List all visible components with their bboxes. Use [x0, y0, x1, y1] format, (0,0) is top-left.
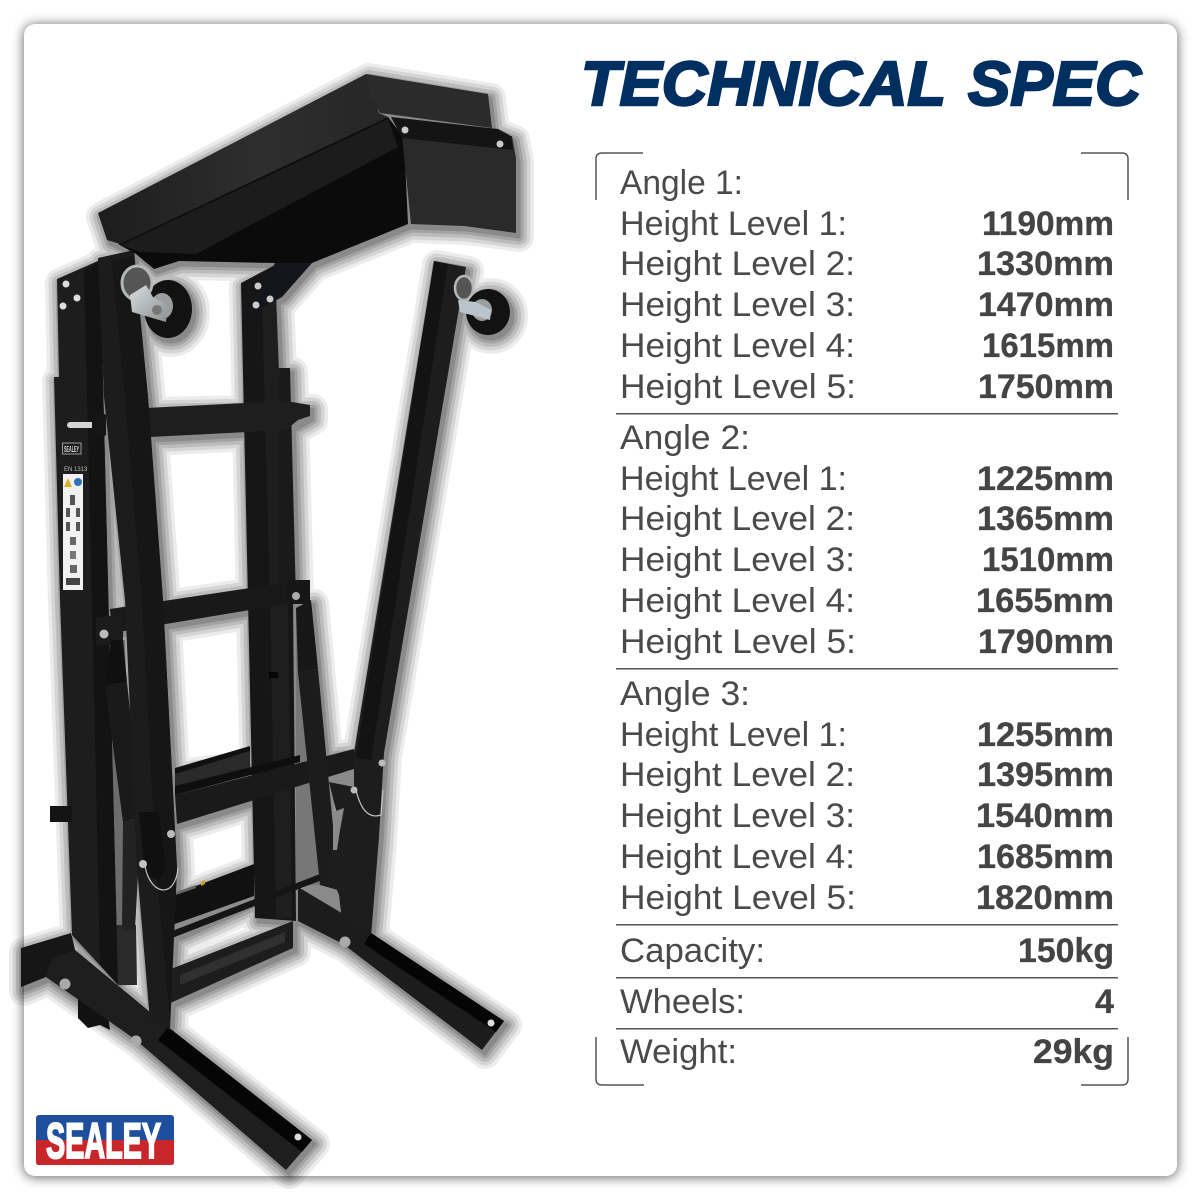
seat support body [118, 117, 408, 269]
spec group: angle 2: 1365mm [977, 500, 1114, 538]
rear left column [50, 260, 118, 985]
spec group: angle 1: 1470mm [978, 286, 1114, 324]
spec group: angle 2: Height Level 1: [620, 460, 847, 498]
left top bolts [60, 280, 80, 310]
spec group: angle 2: 1225mm [977, 460, 1114, 498]
spec group: angle 3: Height Level 2: [620, 756, 855, 794]
rear base bar [21, 933, 80, 987]
spec group: angle 1: Height Level 1: [620, 205, 847, 243]
left base foot [46, 950, 312, 1170]
safety label [62, 443, 88, 590]
spec row: wheels [620, 983, 1114, 1021]
spec group: angle 1: 1750mm [978, 368, 1114, 406]
underside clamp block [78, 995, 110, 1030]
spec group: angle 2 [620, 419, 1114, 661]
logo: Sealey: SEALEY [46, 1113, 161, 1169]
soft shadow behind the stand [24, 78, 519, 1174]
spec group: angle 3: Height Level 4: [620, 838, 855, 876]
spec group: angle 1: Height Level 5: [620, 368, 856, 406]
grey shaded gaps between frame parts [107, 610, 322, 985]
lower rear box frame [168, 921, 293, 1004]
spec group: angle 1: Height Level 4: [620, 327, 855, 365]
spec group: angle 1: 1615mm [982, 327, 1114, 365]
middle cross bar [110, 582, 292, 633]
spec group: angle 3: Angle 3: [620, 675, 750, 713]
spec row: weight: Weight: [620, 1033, 737, 1071]
metal strap with bolts [391, 117, 513, 150]
title: TECHNICAL [581, 50, 946, 119]
seat cushion long [98, 74, 388, 244]
spec group: angle 2: Angle 2: [620, 419, 750, 457]
spec group: angle 2: Height Level 4: [620, 582, 855, 620]
support bracket under seat [246, 263, 312, 317]
product: foldable creeper stand [21, 74, 519, 1174]
left castor wheel [122, 266, 192, 338]
spec row: capacity [620, 932, 1114, 970]
locking pin [67, 414, 106, 436]
left gas strut [96, 615, 141, 930]
spec group: angle 2: Height Level 5: [620, 623, 856, 661]
spec group: angle 3: 1395mm [977, 756, 1114, 794]
spec group: angle 3: Height Level 3: [620, 797, 855, 835]
rear cross rod [172, 874, 322, 938]
title [581, 50, 1142, 119]
spec table frame corners [596, 153, 1128, 1085]
lower cross member [172, 864, 254, 931]
title: SPEC [968, 50, 1142, 119]
spec group: angle 1: Height Level 2: [620, 245, 855, 283]
spec row: capacity: 150kg [1018, 932, 1114, 970]
spec group: angle 3: 1685mm [977, 838, 1114, 876]
spec group: angle 1 [620, 164, 1114, 406]
spec group: angle 3 [620, 675, 1114, 917]
right base foot [298, 887, 504, 1050]
spec group: angle 2: 1790mm [978, 623, 1114, 661]
lower front cross bar [175, 749, 357, 824]
logo: Sealey [36, 1113, 174, 1169]
spec group: angle 3: 1255mm [977, 716, 1114, 754]
spec group: angle 2: 1510mm [982, 541, 1114, 579]
spec group: angle 1: 1190mm [982, 205, 1114, 243]
spec group: angle 3: Height Level 5: [620, 879, 856, 917]
front left leg [98, 250, 178, 1030]
right castor wheel [455, 276, 510, 335]
spec row: wheels: Wheels: [620, 983, 745, 1021]
spec row: weight [620, 1033, 1114, 1071]
right gas strut [287, 580, 338, 890]
seat cushion end [366, 74, 492, 128]
safety label: EN 1313 [64, 467, 88, 473]
rear right column [241, 265, 296, 921]
spec row: capacity: Capacity: [620, 932, 765, 970]
spec group: angle 3: 1540mm [976, 797, 1114, 835]
spec group: angle 1: Angle 1: [620, 164, 743, 202]
step platform [175, 748, 250, 792]
spec row: wheels: 4 [1095, 983, 1114, 1021]
spec group: angle 2: 1655mm [976, 582, 1114, 620]
spec group: angle 3: Height Level 1: [620, 716, 847, 754]
safety label: SEALEY [64, 445, 79, 454]
spec row: weight: 29kg [1033, 1033, 1114, 1071]
right folding leg [329, 261, 466, 937]
spec group: angle 3: 1820mm [976, 879, 1114, 917]
spec group: angle 2: Height Level 2: [620, 500, 855, 538]
upper cylinder cross bar [146, 401, 310, 437]
spec group: angle 1: Height Level 3: [620, 286, 855, 324]
spec group: angle 1: 1330mm [977, 245, 1114, 283]
chest pad [402, 136, 516, 233]
spec group: angle 2: Height Level 3: [620, 541, 855, 579]
